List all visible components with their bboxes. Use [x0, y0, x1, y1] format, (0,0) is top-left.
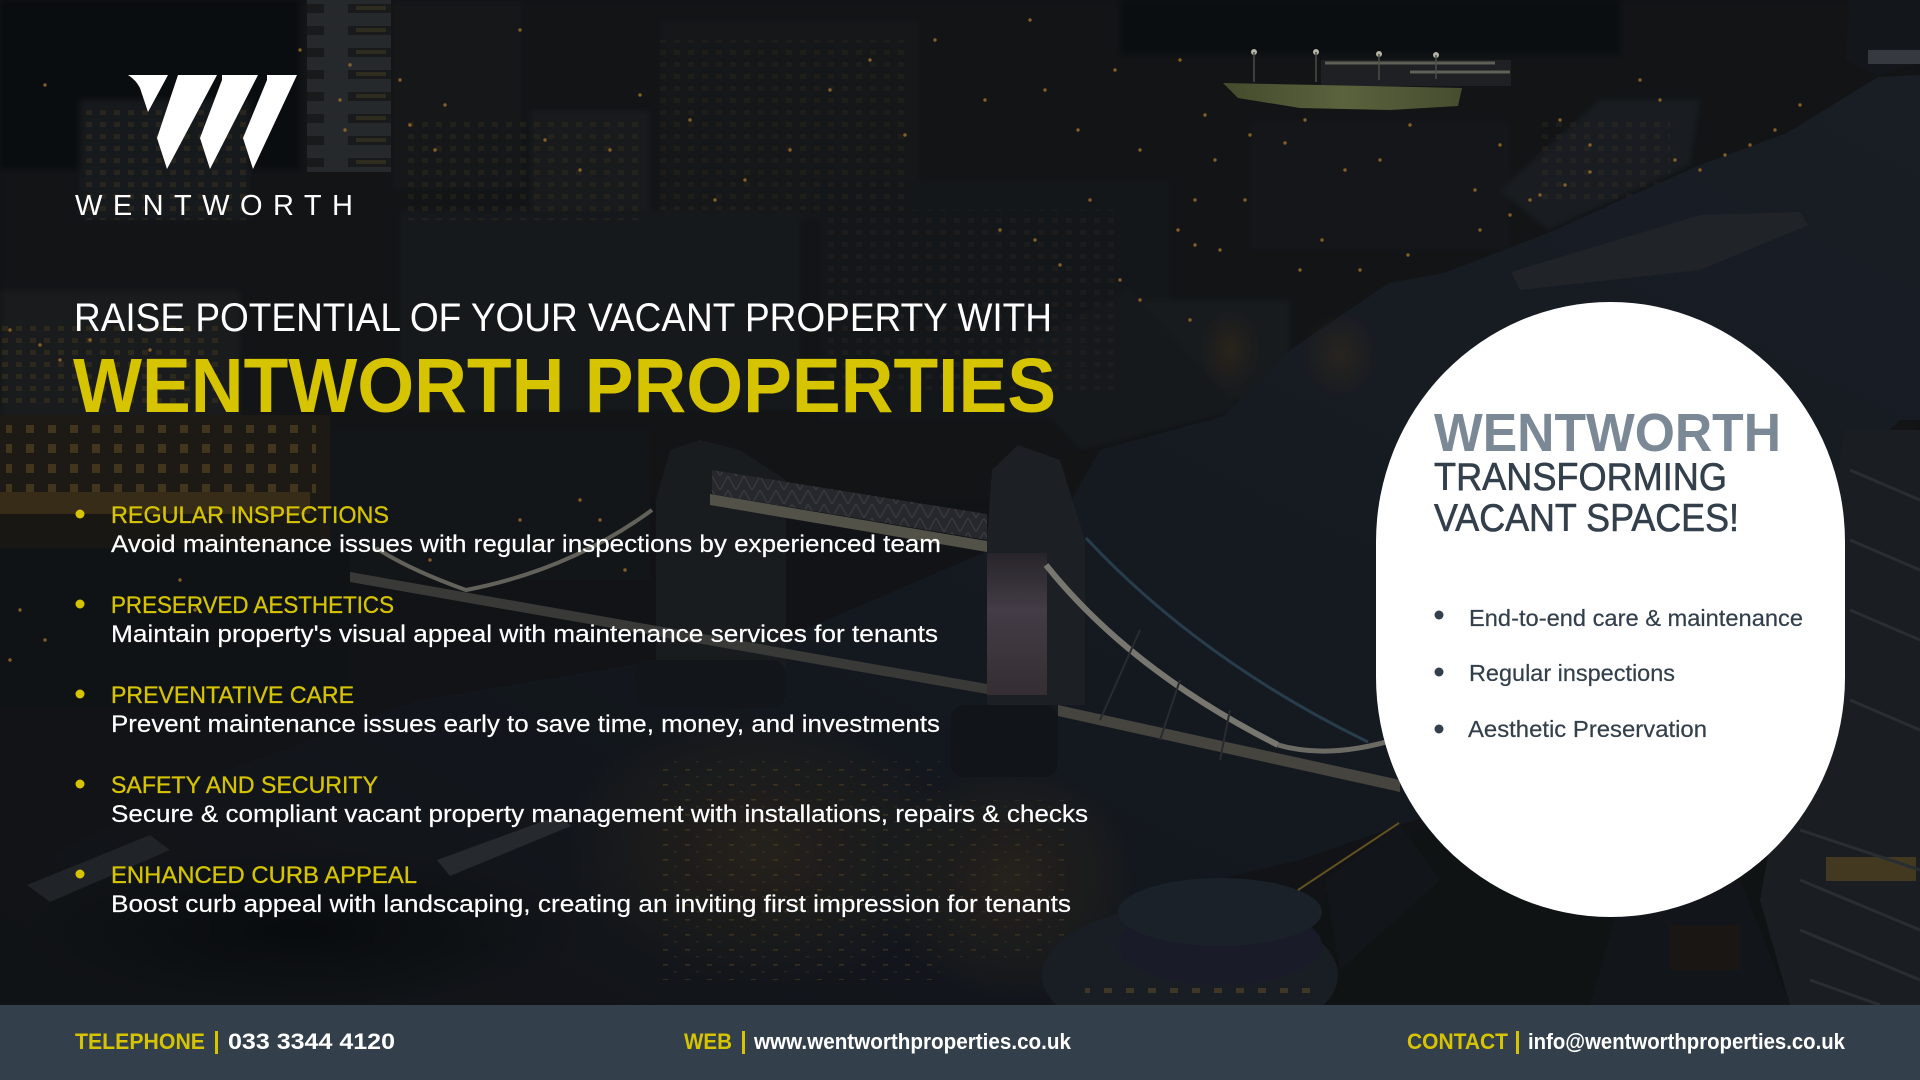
river reflections: [20, 310, 1380, 1010]
suspension cables: [1046, 565, 1278, 745]
south pier: [951, 705, 1058, 777]
item: regular inspections: [76, 502, 941, 558]
heading: WENTWORTH PROPERTIES: [73, 343, 1056, 429]
panel heading: [1434, 403, 1781, 540]
lit riverside building on left: [0, 415, 650, 708]
item: safety and security: [76, 772, 1088, 828]
footer bar: [0, 1005, 1920, 1080]
City Hall: [1042, 823, 1440, 1045]
north bank city mass: [0, 0, 1920, 500]
panel heading: WENTWORTH: [1434, 403, 1781, 463]
south tower: [987, 445, 1085, 705]
logo: Wentworth: [75, 75, 353, 222]
benefits list: [76, 502, 1088, 918]
panel list: [1434, 605, 1803, 742]
item: preserved aesthetics: Maintain property's visual appeal with maintenance services for tenants: [111, 621, 938, 648]
item: preserved aesthetics: PRESERVED AESTHETICS: [111, 592, 394, 619]
item: preventative care: [76, 682, 940, 738]
white rounded panel: [1376, 302, 1845, 917]
item: regular inspections: REGULAR INSPECTIONS: [111, 502, 389, 529]
telephone: 033 3344 4120: [228, 1029, 395, 1054]
north pier: [634, 660, 786, 708]
web: WEB: [684, 1029, 732, 1054]
tourist boats: [27, 815, 571, 902]
panel list: Aesthetic Preservation: [1468, 716, 1707, 742]
panel: transforming vacant spaces: [1376, 302, 1845, 917]
item: preventative care: Prevent maintenance issues early to save time, money, and investments: [111, 711, 940, 738]
item: safety and security: SAFETY AND SECURITY: [111, 772, 378, 799]
logo wordmark: WENTWORTH: [75, 190, 353, 222]
moored boats on north river bank: [1511, 0, 1920, 290]
panel list: Regular inspections: [1469, 660, 1675, 686]
heading: RAISE POTENTIAL OF YOUR VACANT PROPERTY WITH: [74, 296, 1052, 340]
football pitch and floodlights: [1223, 52, 1511, 110]
contact: CONTACT: [1407, 1029, 1509, 1054]
contact: [1407, 1029, 1846, 1054]
item: safety and security: Secure & compliant vacant property management with installations, repairs & checks: [111, 801, 1088, 828]
panel list: End-to-end care & maintenance: [1469, 605, 1803, 631]
high walkway: [712, 470, 987, 540]
item: preventative care: PREVENTATIVE CARE: [111, 682, 354, 709]
telephone: [75, 1029, 395, 1054]
contact: info@wentworthproperties.co.uk: [1528, 1029, 1846, 1054]
city lights: [10, 20, 1800, 660]
roadway: [350, 572, 987, 694]
item: regular inspections: Avoid maintenance issues with regular inspections by experienced team: [111, 531, 941, 558]
web: www.wentworthproperties.co.uk: [753, 1029, 1072, 1054]
south bank at bottom right: [1290, 420, 1920, 1005]
panel heading: VACANT SPACES!: [1434, 497, 1739, 540]
panel heading: TRANSFORMING: [1434, 456, 1727, 499]
item: enhanced curb appeal: Boost curb appeal with landscaping, creating an inviting first impression for tenants: [111, 891, 1071, 918]
icon: W mark: [128, 75, 297, 169]
item: enhanced curb appeal: [76, 862, 1071, 918]
Tower Bridge: [350, 440, 1400, 792]
north tower: [656, 440, 786, 702]
item: preserved aesthetics: [76, 592, 938, 648]
item: enhanced curb appeal: ENHANCED CURB APPEAL: [111, 862, 417, 889]
telephone: TELEPHONE: [75, 1029, 205, 1054]
heading: [73, 296, 1056, 429]
